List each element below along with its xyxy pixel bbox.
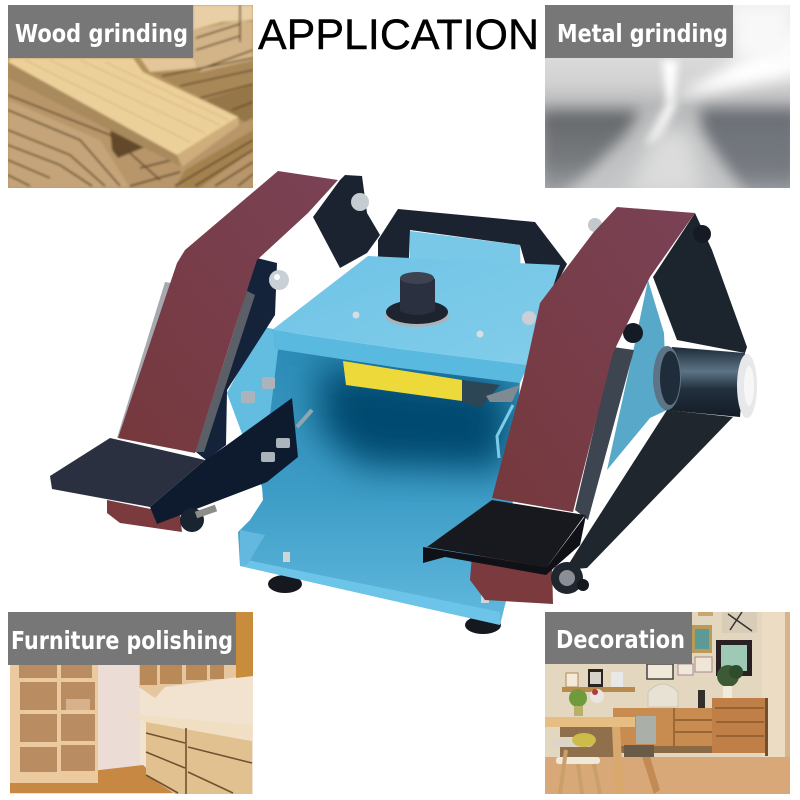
blue body (221, 256, 560, 625)
label: metal grinding: Metal grinding (557, 19, 728, 48)
right platform (423, 500, 586, 575)
title: APPLICATION (258, 11, 539, 59)
motor shaft (653, 346, 757, 418)
main product: double belt grinder (50, 171, 757, 634)
left sanding belt (107, 171, 338, 532)
right belt back (522, 213, 747, 570)
left platform and bracket (50, 398, 298, 532)
screws (352, 312, 360, 318)
panel: wood grinding (8, 5, 253, 188)
feet (268, 575, 501, 634)
knob (385, 272, 449, 327)
right sanding belt (470, 207, 695, 604)
panel: decoration (545, 612, 790, 794)
handle (378, 209, 567, 325)
label: decoration: Decoration (556, 625, 685, 654)
panel: furniture polishing (8, 612, 253, 794)
left arm and bracket (117, 175, 380, 460)
label: wood grinding: Wood grinding (15, 19, 188, 48)
panel: metal grinding (545, 5, 790, 188)
